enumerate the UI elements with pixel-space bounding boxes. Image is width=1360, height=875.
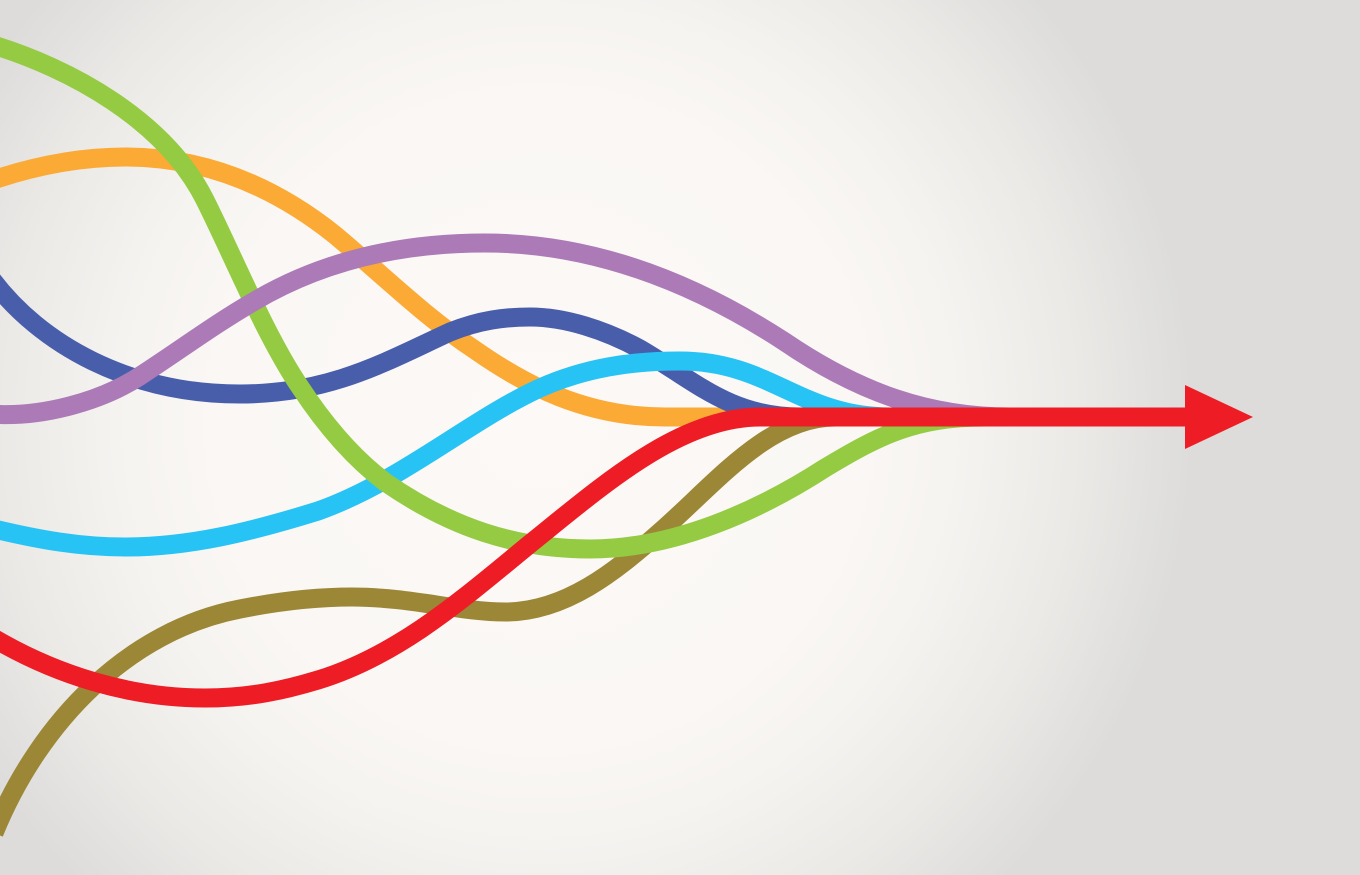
- line: orange: [0, 157, 820, 417]
- line: green: [0, 44, 1060, 549]
- arrow shaft: [0, 417, 1190, 698]
- line: purple: [0, 243, 1100, 417]
- line: olive brown: [0, 417, 950, 833]
- line: dark blue: [0, 277, 900, 417]
- line: cyan: [0, 361, 1000, 547]
- arrow: red line with arrowhead: [0, 385, 1253, 698]
- arrowhead: [1185, 385, 1253, 449]
